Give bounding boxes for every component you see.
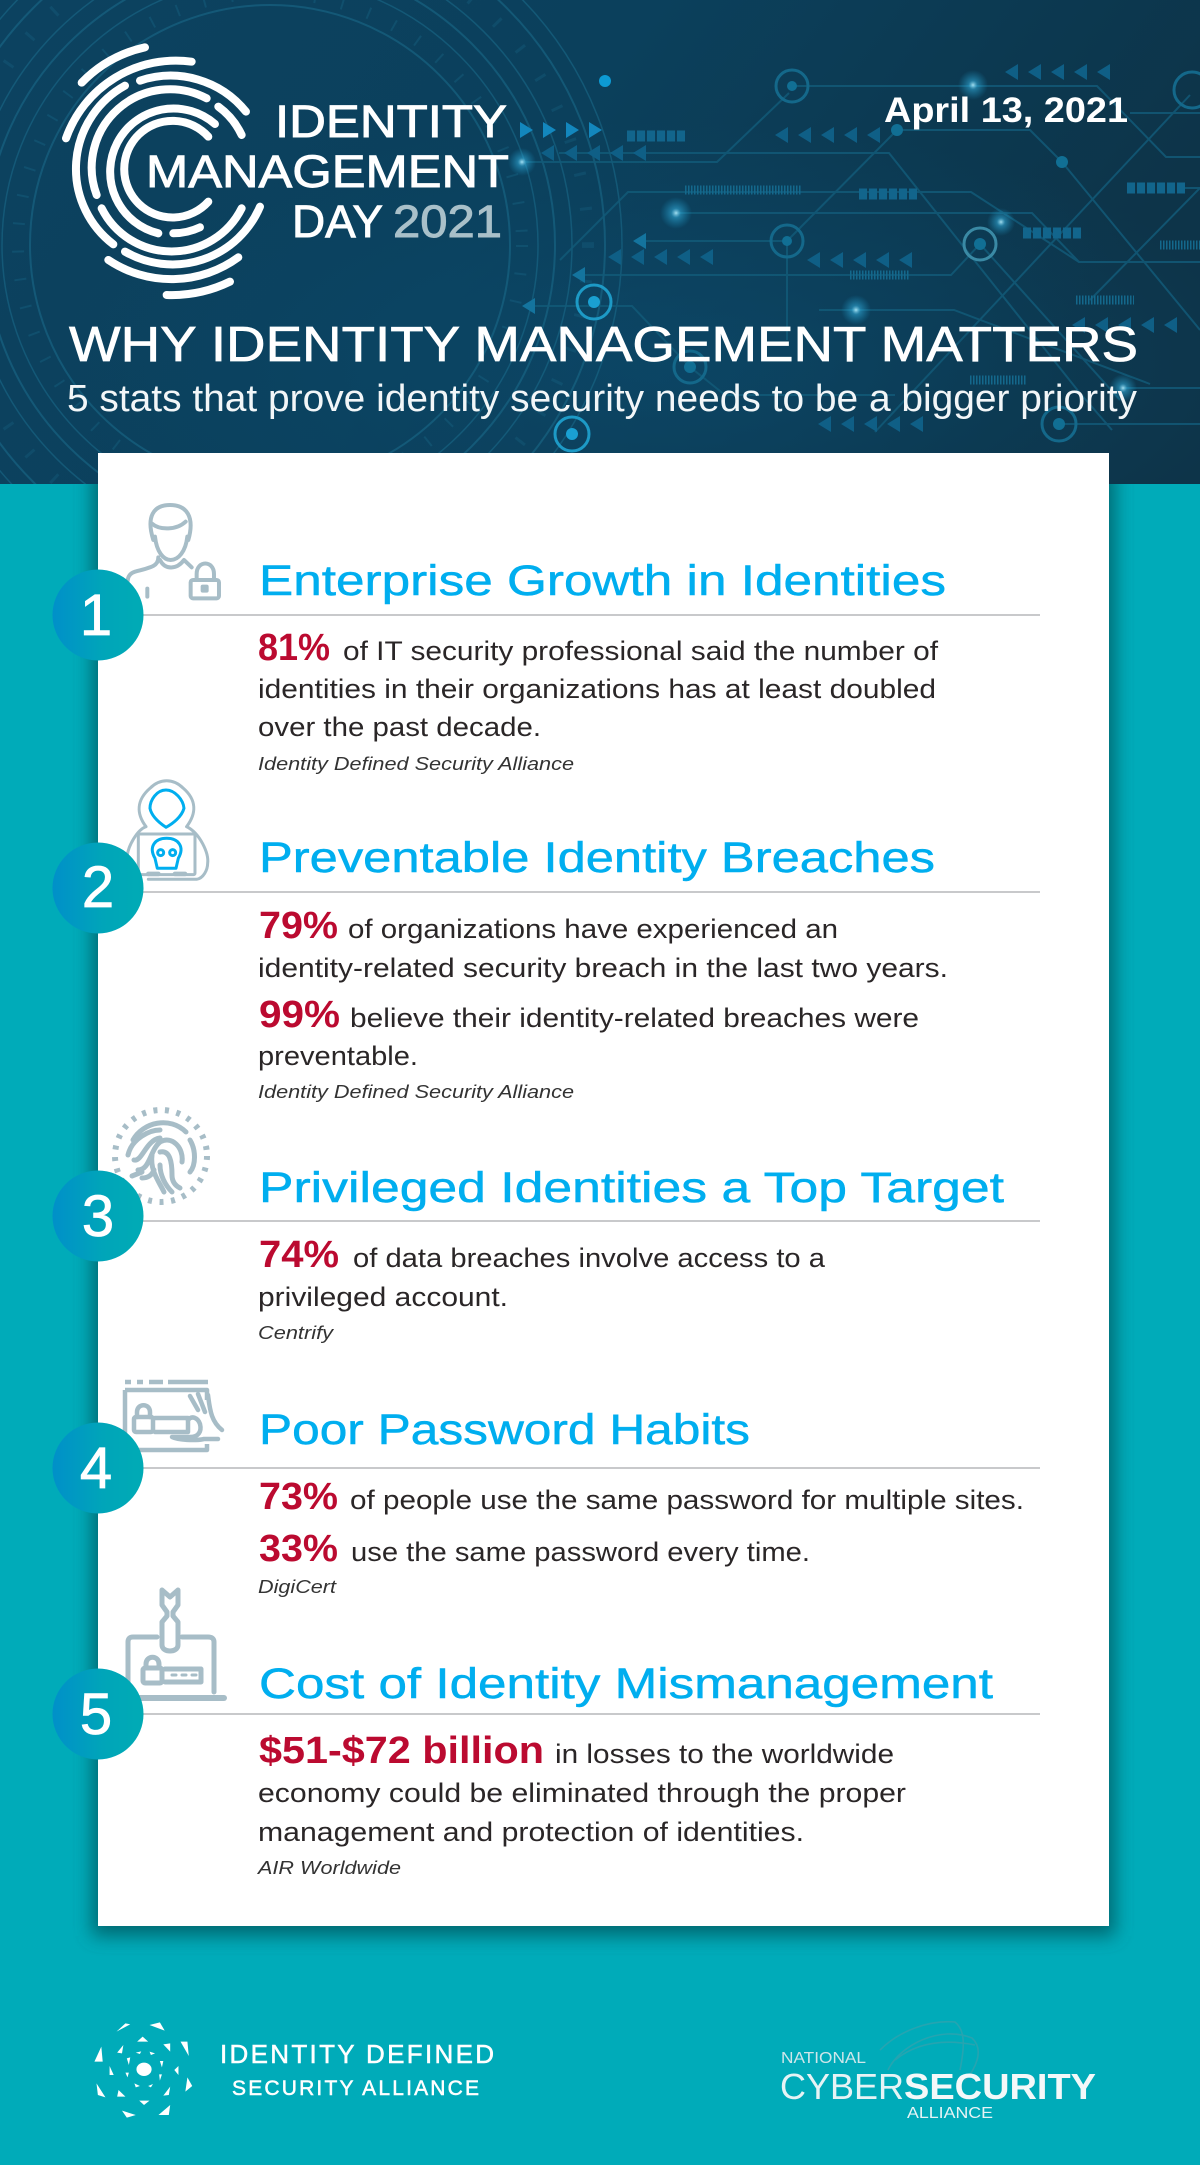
stat text: of people use the same password for multiple sites.	[350, 1485, 1024, 1515]
icon: password field with hand	[125, 1382, 222, 1450]
stat text: 79%	[259, 905, 338, 947]
icon: fingerprint in dotted circle	[115, 1110, 207, 1202]
icon: globe swoosh	[880, 2022, 978, 2080]
stat text: economy could be eliminated through the proper	[258, 1778, 906, 1808]
number badge 4	[52, 1422, 144, 1514]
section 2: Preventable Identity Breaches	[52, 781, 1040, 1102]
stat text: believe their identity-related breaches were	[350, 1003, 919, 1033]
stat text: management and protection of identities.	[258, 1817, 804, 1847]
section title: Privileged Identities a Top Target	[259, 1164, 1004, 1212]
stat text	[258, 1730, 906, 1847]
number badge 4: 4	[80, 1436, 112, 1501]
number badge 1	[52, 570, 144, 660]
stat text: 74%	[259, 1234, 339, 1276]
logo text: ALLIANCE	[907, 2105, 993, 2122]
icon: person with padlock	[127, 505, 219, 598]
stat text: 81%	[258, 627, 330, 669]
logo: Identity Management Day 2021	[66, 47, 509, 295]
logo text: IDENTITY	[275, 96, 507, 147]
stat text	[258, 905, 948, 1071]
section 3: Privileged Identities a Top Target	[52, 1110, 1040, 1343]
stat text	[258, 627, 939, 742]
stat text: over the past decade.	[258, 712, 541, 742]
rule	[143, 891, 1040, 893]
number badge 5	[52, 1668, 144, 1760]
main heading: WHY IDENTITY MANAGEMENT MATTERS	[69, 318, 1138, 372]
stat text: of organizations have experienced an	[348, 914, 838, 944]
section title: Enterprise Growth in Identities	[259, 557, 946, 605]
number badge 2	[52, 842, 144, 934]
stat text: 33%	[259, 1528, 338, 1570]
stat text: preventable.	[258, 1041, 418, 1071]
logo: Identity Defined Security Alliance	[94, 2022, 494, 2118]
stat text: 99%	[259, 994, 340, 1036]
logo text: IDENTITY DEFINED	[220, 2039, 494, 2069]
stat text: of data breaches involve access to a	[353, 1243, 826, 1273]
logo text	[780, 2050, 1096, 2122]
stat text: in losses to the worldwide	[555, 1739, 894, 1769]
logo text	[220, 2039, 494, 2100]
logo text: SECURITY ALLIANCE	[232, 2077, 479, 2100]
stat text	[259, 1476, 1024, 1570]
stat text: privileged account.	[258, 1282, 508, 1312]
icon: fingerprint logo mark	[66, 47, 260, 295]
section 4: Poor Password Habits	[52, 1382, 1040, 1597]
stat text: of IT security professional said the number of	[343, 636, 939, 666]
date: April 13, 2021	[884, 91, 1128, 130]
logo text: NATIONAL	[781, 2050, 866, 2067]
panel: white card	[98, 453, 1109, 1926]
rule	[143, 1220, 1040, 1222]
source: Identity Defined Security Alliance	[258, 1082, 574, 1102]
stat text: use the same password every time.	[351, 1537, 810, 1567]
logo text: SECURITY	[904, 2066, 1096, 2107]
stat text	[258, 1234, 826, 1312]
icon: shard ring mark	[94, 2022, 192, 2118]
source: Identity Defined Security Alliance	[258, 754, 574, 774]
section title: Preventable Identity Breaches	[259, 834, 935, 882]
logo text	[146, 96, 509, 247]
source: DigiCert	[258, 1577, 337, 1597]
logo text: DAY	[292, 196, 383, 247]
section title: Poor Password Habits	[259, 1406, 750, 1454]
subheading: 5 stats that prove identity security needs to be a bigger priority	[67, 378, 1137, 420]
logo text: MANAGEMENT	[146, 146, 509, 197]
stat text: $51-$72 billion	[259, 1730, 544, 1772]
icon: missile hitting laptop with padlock	[122, 1590, 224, 1698]
rule	[143, 614, 1040, 616]
section 1: Enterprise Growth in Identities	[52, 505, 1040, 774]
card shadow	[92, 470, 1115, 1936]
source: AIR Worldwide	[257, 1858, 401, 1878]
stat text: identities in their organizations has at least doubled	[258, 674, 936, 704]
source: Centrify	[258, 1323, 334, 1343]
logo: National Cyber Security Alliance	[780, 2022, 1096, 2122]
icon: hooded hacker with laptop and skull	[127, 781, 208, 879]
logo text: CYBER	[780, 2066, 904, 2107]
stat text: 73%	[259, 1476, 338, 1518]
rule	[143, 1467, 1040, 1469]
section title: Cost of Identity Mismanagement	[259, 1660, 993, 1708]
header background with circuit pattern	[0, 0, 1200, 484]
stat text: identity-related security breach in the last two years.	[258, 953, 948, 983]
logo text: 2021	[393, 196, 502, 247]
number badge 3: 3	[82, 1184, 114, 1249]
number badge 5: 5	[80, 1682, 112, 1747]
section 5: Cost of Identity Mismanagement	[52, 1590, 1040, 1878]
number badge 3	[52, 1170, 144, 1262]
rule	[143, 1713, 1040, 1715]
number badge 1: 1	[80, 583, 112, 648]
number badge 2: 2	[82, 855, 114, 920]
